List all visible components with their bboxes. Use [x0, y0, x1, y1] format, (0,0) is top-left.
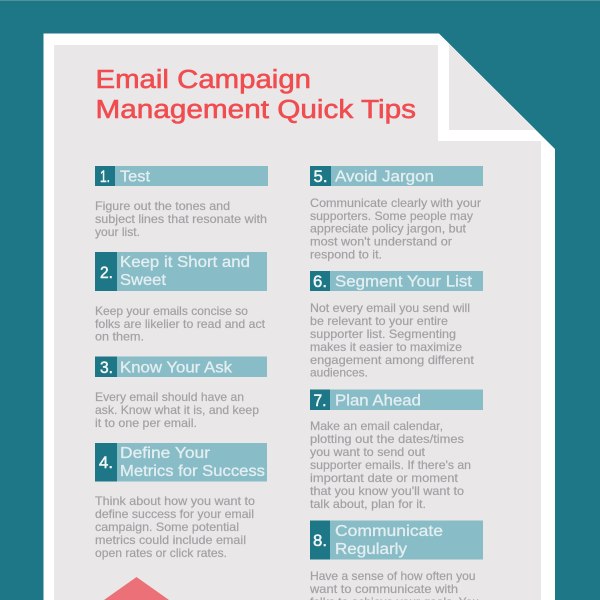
title — [96, 66, 416, 124]
tip 4: define success for your email — [95, 507, 254, 521]
tip 4: open rates or click rates. — [95, 546, 227, 560]
tip 5: respond to it. — [310, 248, 382, 262]
tip 7: talk about, plan for it. — [310, 497, 426, 511]
tip 7: Plan Ahead — [335, 392, 421, 410]
tip 4: campaign. Some potential — [95, 520, 239, 534]
tip 4: metrics could include email — [95, 533, 246, 547]
tip 5 — [310, 166, 483, 262]
title: Email Campaign — [96, 66, 311, 94]
tip 2: 2. — [100, 264, 113, 282]
tip 6: be relevant to your entire — [310, 314, 448, 328]
tip 2: Sweet — [120, 272, 167, 289]
tip 8: want to communicate with — [309, 582, 458, 596]
tip 4: Metrics for Success — [120, 463, 265, 480]
tip 5: appreciate policy jargon, but — [310, 222, 467, 236]
tip 6: audiences. — [310, 366, 368, 380]
tip 3: it to one per email. — [95, 416, 197, 430]
tip 5: 5. — [314, 168, 328, 186]
tip 3 — [95, 356, 267, 430]
tip 7: plotting out the dates/times — [310, 432, 464, 446]
tip 7: supporter emails. If there's an — [310, 458, 471, 472]
title: Management Quick Tips — [96, 96, 416, 124]
tip 7 — [310, 390, 483, 511]
tip 5: Avoid Jargon — [335, 168, 434, 186]
tip 6: engagement among different — [310, 353, 475, 367]
tip 1: Test — [120, 168, 151, 186]
tip 5: most won't understand or — [310, 234, 452, 248]
tip 5: supporters. Some people may — [310, 209, 473, 223]
tip 1: Figure out the tones and — [95, 199, 230, 213]
tip 6: Not every email you send will — [310, 301, 470, 315]
tip 7: you want to send out — [310, 445, 426, 459]
tip 7: that you know you'll want to — [310, 484, 464, 498]
tip 6: Segment Your List — [335, 274, 473, 290]
tip 2: on them. — [95, 330, 144, 344]
tip 8 — [309, 520, 483, 600]
tip 7: important date or moment — [310, 471, 459, 485]
tip 6: makes it easier to maximize — [310, 340, 462, 354]
tip 3: Every email should have an — [95, 390, 244, 404]
tip 1 — [95, 166, 268, 239]
tip 4 — [95, 443, 267, 560]
tip 6: supporter list. Segmenting — [310, 327, 456, 341]
tip 4: Think about how you want to — [95, 494, 255, 508]
tip 2: folks are likelier to read and act — [95, 317, 266, 331]
document sheet: grey panel — [54, 45, 541, 600]
tip 8: Communicate — [335, 523, 443, 540]
tip 8: Regularly — [335, 541, 407, 558]
tip 1: 1. — [100, 168, 110, 186]
tip 1: your list. — [95, 225, 140, 239]
tip 4: 4. — [99, 454, 113, 472]
tip 7: 7. — [314, 392, 326, 410]
tip 6: 6. — [313, 273, 327, 291]
tip 3: ask. Know what it is, and keep — [95, 403, 259, 417]
folded corner — [449, 44, 535, 130]
tip 2: Keep your emails concise so — [95, 304, 248, 318]
tip 3: Know Your Ask — [120, 360, 232, 376]
tip 8: 8. — [313, 532, 327, 550]
decorative pink envelope shape — [104, 577, 169, 600]
tip 2: Keep it Short and — [120, 254, 250, 271]
tip 3: 3. — [100, 359, 113, 377]
tip 2 — [95, 252, 267, 344]
tip 8: Have a sense of how often you — [310, 569, 476, 583]
tip 7: Make an email calendar, — [310, 419, 443, 433]
tip 4: Define Your — [120, 445, 210, 462]
tip 6 — [310, 271, 483, 380]
tip 5: Communicate clearly with your — [310, 196, 481, 210]
tip 1: subject lines that resonate with — [95, 212, 267, 226]
